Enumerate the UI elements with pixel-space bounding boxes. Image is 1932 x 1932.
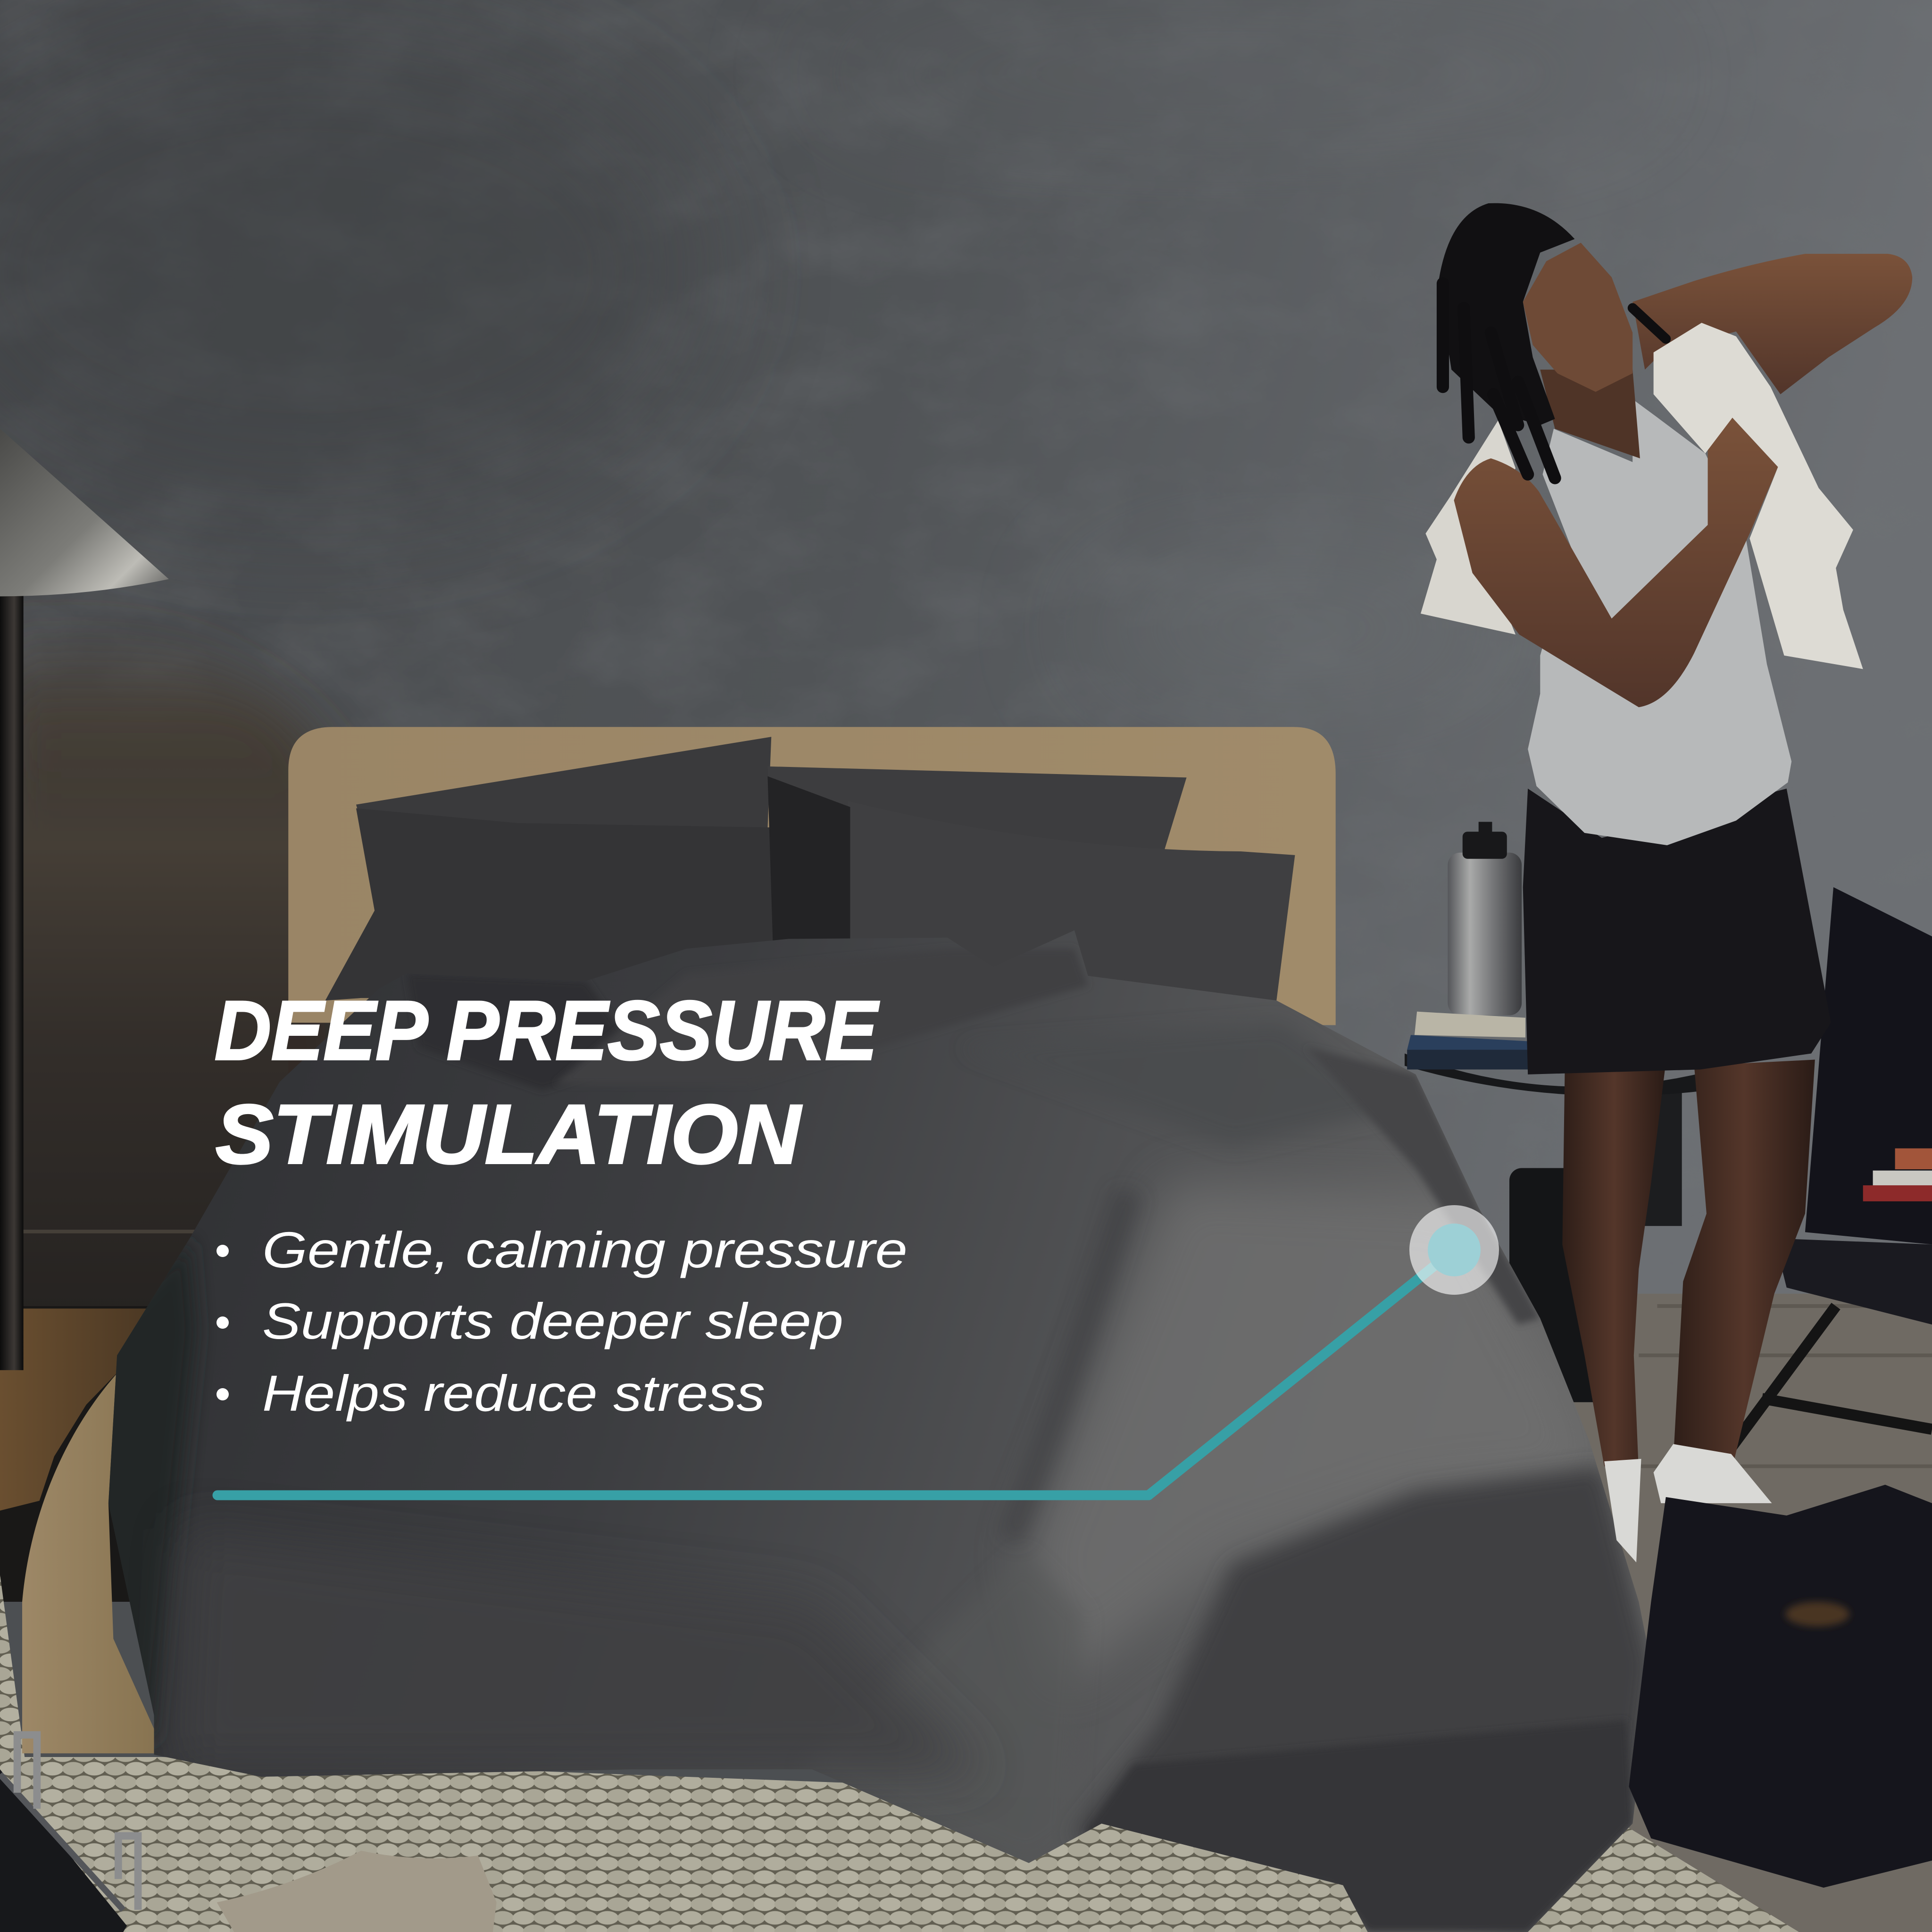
shoe — [217, 1851, 497, 1932]
legs — [1562, 1060, 1815, 1473]
headboard — [288, 727, 1336, 1025]
front towel — [1654, 323, 1863, 669]
duvet folds and shading — [74, 949, 1651, 1932]
bed frame — [22, 1363, 165, 1753]
shorts — [1523, 789, 1831, 1074]
suitcase — [0, 1735, 138, 1932]
books on chair — [1863, 1149, 1932, 1201]
lamp-lit wall corner — [0, 615, 394, 1331]
duffel bag — [1629, 1485, 1932, 1888]
water bottle — [1448, 822, 1522, 1015]
marker dot — [1409, 1205, 1499, 1295]
armchair — [1731, 887, 1932, 1448]
rug — [0, 1574, 1799, 1932]
pillows — [325, 737, 1295, 1000]
title: STIMULATION — [216, 1087, 802, 1181]
floor lamp — [0, 429, 169, 1370]
bullet: sleep: Supports deeper sleep — [262, 1292, 843, 1349]
wall — [0, 0, 1932, 1355]
side table — [0, 1308, 158, 1511]
bullet list — [217, 1221, 908, 1422]
socks — [1604, 1444, 1772, 1562]
neck and face — [1523, 243, 1640, 458]
teal leader line — [217, 1250, 1454, 1495]
title — [215, 983, 880, 1181]
front arm — [1454, 418, 1778, 707]
floor — [0, 1294, 1932, 1932]
callout: deep pressure stimulation — [215, 983, 1499, 1495]
back towel — [1421, 420, 1516, 634]
duvet — [74, 930, 1651, 1932]
book stack — [1407, 1012, 1562, 1069]
dreadlocks — [1438, 203, 1666, 478]
nightstand with books and bottle — [1405, 822, 1707, 1402]
bullet: stress: Helps reduce stress — [262, 1365, 765, 1422]
raised arm — [1632, 254, 1912, 394]
title: DEEP PRESSURE — [215, 983, 880, 1077]
man — [1421, 203, 1912, 1562]
tank top — [1528, 399, 1791, 845]
bullet: gentle: Gentle, calming pressure — [262, 1221, 908, 1278]
